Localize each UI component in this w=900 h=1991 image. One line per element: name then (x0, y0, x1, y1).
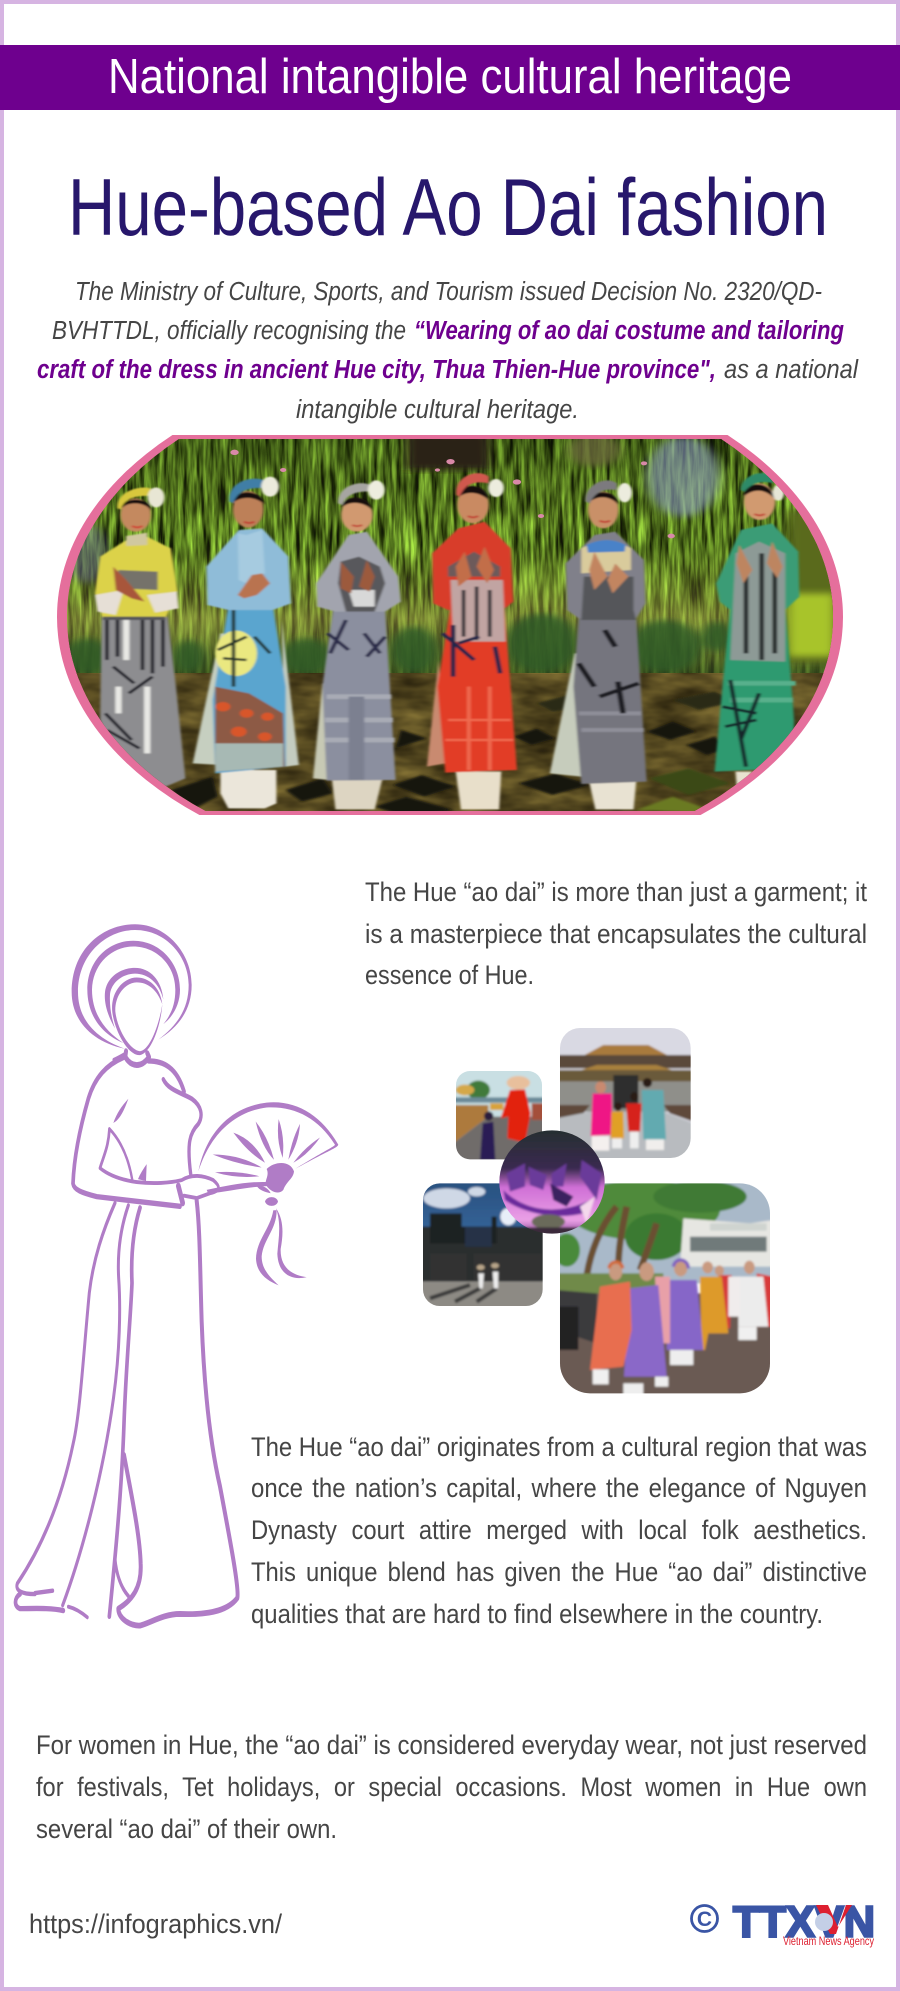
model 5: dark grey with blue yoke (550, 480, 647, 809)
agency line: Vietnam News Agency (783, 1934, 874, 1948)
intro paragraph: craft of the dress in ancient Hue city, Thua Thien-Hue province", (37, 356, 716, 384)
details: bodice darts (113, 1099, 147, 1181)
bushes (64, 613, 733, 675)
copyright mark: C (697, 1908, 712, 1931)
header banner (0, 45, 900, 110)
intro paragraph: The Ministry of Culture, Sports, and Tourism issued Decision No. 2320/QD- (75, 278, 822, 306)
paragraph: masterpiece (365, 877, 867, 990)
intro paragraph: intangible cultural heritage. (296, 396, 579, 424)
halo hat (72, 924, 192, 1055)
copyright mark (692, 1906, 718, 1932)
foliage backdrop (40, 433, 860, 680)
line art: woman in ao dai holding a fan (15, 924, 338, 1626)
banner heading: National intangible cultural heritage (108, 50, 792, 104)
photo: group in royal robes (553, 1180, 773, 1397)
intro paragraph (37, 278, 859, 424)
paragraph: everyday wear: several “ao dai” of their own. (36, 1814, 337, 1844)
model 3: grey with bamboo (313, 480, 401, 809)
model 2: blue with moon and village (193, 477, 299, 808)
paragraph: masterpiece: essence of Hue. (365, 960, 534, 990)
intro paragraph: “Wearing of ao dai costume and tailoring (414, 317, 844, 345)
photo: figures before tomb stairs (420, 1180, 545, 1308)
intro paragraph: BVHTTDL, officially recognising the (52, 317, 406, 345)
oval photo: six models in ao dai (57, 435, 843, 815)
model 1: yellow top (95, 487, 185, 787)
paragraph: everyday wear (36, 1730, 867, 1844)
photo: family at imperial gate (557, 1025, 693, 1162)
paragraph: origins: qualities that are hard to find elsewhere in the country. (251, 1599, 823, 1629)
model 4: red with temple (427, 473, 517, 809)
dress outline strokes (15, 1051, 238, 1626)
hand fan (198, 1102, 338, 1285)
lawn ground (76, 673, 824, 811)
intro paragraph: as a national (724, 356, 859, 384)
footer url: https://infographics.vn/ (29, 1909, 282, 1939)
TTXVN wordmark: TTXVN (733, 1898, 875, 1946)
model 6: green (715, 473, 799, 785)
logo: copyright TTXVN Vietnam News Agency (692, 1898, 875, 1948)
photo: woman and child on bridge (456, 1071, 542, 1160)
paragraph: origins (251, 1432, 867, 1629)
photo: dancers on purple stage (499, 1130, 605, 1234)
photo collage (420, 1025, 773, 1397)
